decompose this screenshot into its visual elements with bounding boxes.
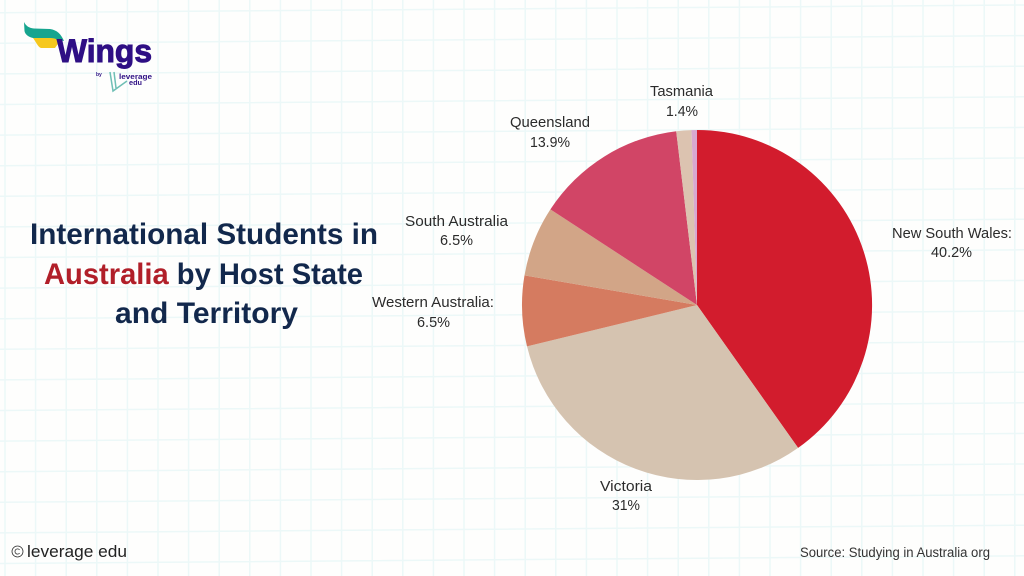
- label: Western Australia: Western Australia:: [372, 294, 494, 311]
- icon: leverage V mark: [110, 72, 127, 91]
- label: South Australia: South Australia: [405, 213, 509, 230]
- brand name: leverage edu: [27, 542, 127, 561]
- slice: Western Australia: [522, 275, 697, 346]
- icon: wing swoosh: [24, 22, 64, 48]
- label: Victoria: [600, 478, 653, 514]
- label: Western Australia: [372, 294, 494, 331]
- logo leverage name: leverage: [119, 72, 152, 81]
- label: New South Wales: 40.2%: [931, 244, 972, 261]
- logo wordmark: Wings: [57, 33, 152, 69]
- source note: Source: Studying in Australia org: [800, 545, 990, 560]
- label: Queensland: Queensland: [510, 114, 590, 131]
- slice: Victoria: [527, 305, 798, 480]
- label: Western Australia: 6.5%: [417, 314, 450, 331]
- logo: Wings by leverage edu: [24, 22, 152, 91]
- title line 2: Australia by Host State: [44, 258, 363, 291]
- logo byline: by: [96, 72, 102, 78]
- label: Victoria: 31%: [612, 497, 640, 514]
- title line 3: and Territory: [115, 297, 298, 330]
- label: South Australia: 6.5%: [440, 232, 473, 249]
- label: Queensland: 13.9%: [530, 134, 570, 151]
- label: New South Wales: New South Wales:: [892, 225, 1012, 242]
- label: Tasmania: Tasmania: [650, 83, 714, 100]
- slice: other: [676, 130, 697, 305]
- slice: Tasmania: [692, 130, 697, 305]
- slice: New South Wales: [697, 130, 872, 448]
- label: Queensland: [510, 114, 590, 151]
- title: [30, 218, 378, 330]
- brand footer: leverage edu: [12, 542, 127, 561]
- slice: South Australia: [524, 209, 697, 305]
- title line 1: International Students in: [30, 218, 378, 251]
- label: New South Wales: [892, 225, 1012, 261]
- slice: Queensland: [550, 131, 697, 305]
- label: Victoria: Victoria: [600, 478, 653, 495]
- label: Tasmania: 1.4%: [666, 103, 698, 120]
- icon: copyright: [12, 546, 23, 557]
- logo edu name: edu: [129, 78, 142, 87]
- label: South Australia: [405, 213, 509, 249]
- label: Tasmania: [650, 83, 714, 120]
- pie chart: [522, 130, 872, 480]
